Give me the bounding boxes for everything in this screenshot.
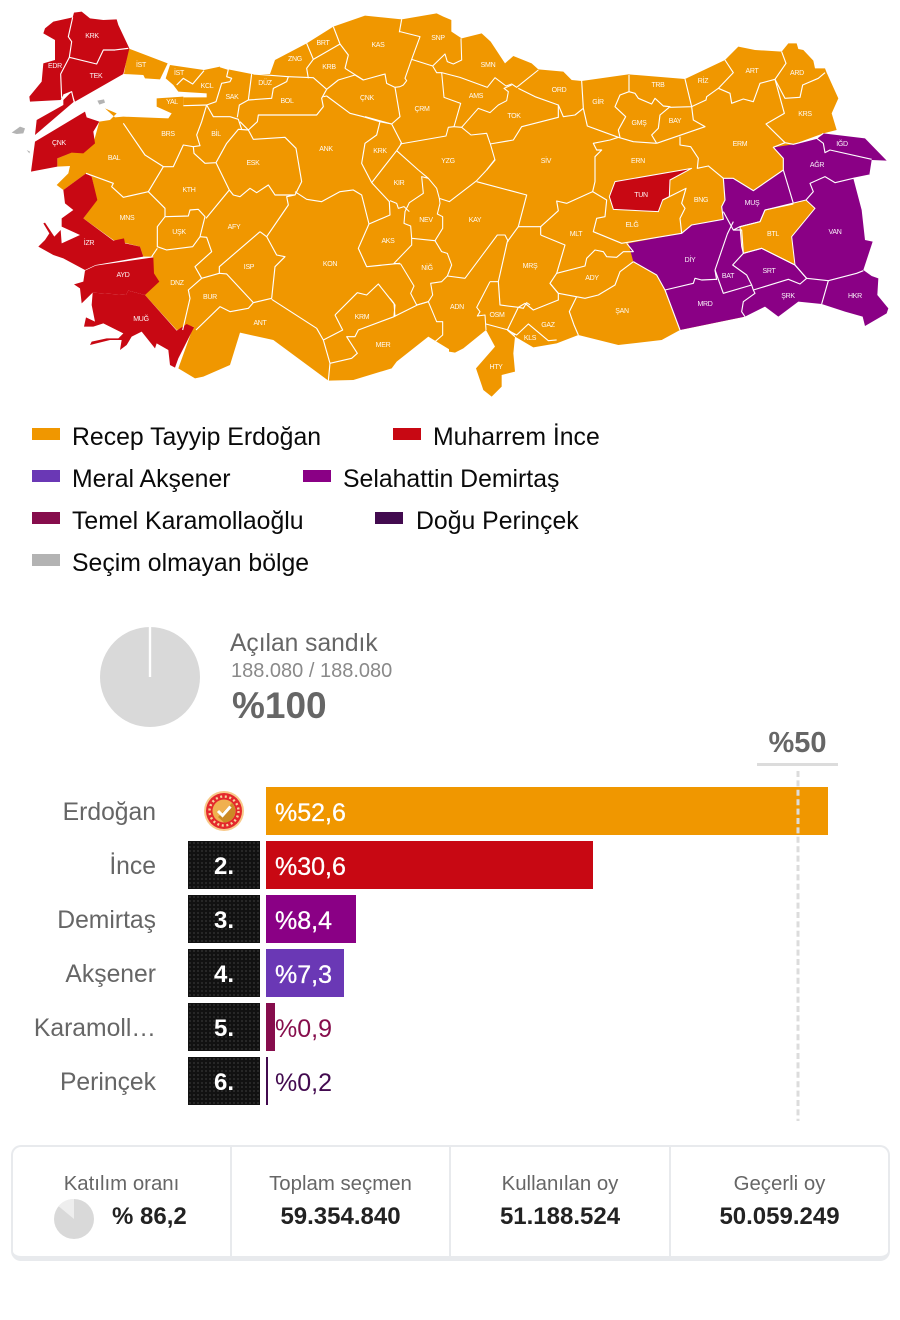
province labels: IĞD [836, 139, 848, 148]
row: İnce: %30,6 [275, 853, 346, 881]
province labels: BOL [280, 98, 294, 105]
province labels: TEK [90, 73, 103, 80]
Tunceli [609, 168, 692, 212]
province labels: ERN [631, 158, 645, 165]
row: Demirtaş: 3. [214, 907, 234, 934]
province labels: TRB [651, 82, 665, 89]
stat: votes used [451, 1147, 671, 1256]
opened ballot boxes text: %100 [232, 685, 327, 726]
province labels: ADN [450, 304, 464, 311]
province labels: YAL [166, 99, 178, 106]
province labels: EDR [48, 63, 62, 70]
province labels: KTH [182, 187, 196, 194]
province labels: SAK [225, 94, 239, 101]
southeast in Demirtaş purple [628, 133, 888, 330]
legend: Akşener: Meral Akşener [72, 466, 230, 493]
province labels: SMN [481, 62, 496, 69]
row: Demirtaş: Demirtaş [57, 907, 156, 934]
stat: turnout: % 86,2 [112, 1203, 187, 1230]
province labels: NİĞ [421, 263, 433, 272]
province labels: RİZ [698, 76, 709, 85]
province labels: AFY [228, 224, 241, 231]
stat: votes used: Kullanılan oy [502, 1173, 618, 1195]
province labels: KRK [373, 148, 387, 155]
map: Turkey provinces [12, 12, 888, 397]
province labels: ANK [319, 146, 333, 153]
province labels: KRK [85, 33, 99, 40]
province labels: BİL [211, 129, 221, 138]
row: Demirtaş [57, 895, 356, 943]
province labels: GİR [592, 97, 604, 106]
province labels: ŞRK [781, 293, 795, 300]
province labels: MRD [697, 301, 713, 308]
province labels: HTY [489, 364, 503, 371]
stat: turnout: Katılım oranı [64, 1173, 179, 1195]
map west half [12, 12, 451, 381]
row: Demirtaş: %8,4 [275, 907, 332, 935]
province labels: ŞAN [615, 308, 629, 315]
row: Erdoğan: %52,6 [275, 799, 346, 827]
legend: Erdoğan: Recep Tayyip Erdoğan [72, 424, 321, 451]
opened ballot boxes text [230, 630, 392, 726]
province labels: AMS [469, 93, 484, 100]
row: Perinçek: Perinçek [60, 1069, 156, 1096]
central borders: Nevşehir, Niğde, Kayseri, Adana [390, 170, 530, 342]
Muğla [84, 291, 194, 368]
İzmir [38, 173, 143, 270]
province labels: UŞK [172, 229, 186, 236]
province labels: ZNG [288, 56, 302, 63]
province labels: BUR [203, 294, 217, 301]
legend: İnce: Muharrem İnce [433, 424, 600, 451]
province labels [48, 33, 862, 371]
row: Perinçek: 6. [214, 1069, 234, 1096]
legend: Perinçek: Doğu Perinçek [416, 508, 579, 535]
Gelibolu [35, 92, 74, 135]
province labels: İST [136, 60, 147, 69]
province labels: ARD [790, 70, 804, 77]
legend: Demirtaş: Selahattin Demirtaş [343, 466, 559, 493]
province labels: MRŞ [523, 263, 538, 270]
row: Karamollaoğlu: %0,9 [275, 1015, 332, 1043]
province labels: BRT [317, 40, 331, 47]
province labels: HKR [848, 293, 862, 300]
row: Karamollaoğlu: Karamoll… [34, 1015, 156, 1042]
province labels: ISP [244, 264, 255, 271]
province labels: BAT [722, 273, 735, 280]
province labels: ANT [253, 320, 268, 327]
province labels: KIR [394, 180, 405, 187]
province labels: BAY [669, 118, 682, 125]
stat: total voters: 59.354.840 [280, 1203, 401, 1230]
province labels: KRB [322, 64, 336, 71]
row: Akşener: 4. [214, 961, 234, 988]
province labels: SRT [763, 268, 777, 275]
province labels: AKS [381, 238, 395, 245]
legend: no election: Seçim olmayan bölge [72, 550, 309, 577]
row: Akşener [65, 949, 344, 997]
stat: votes used: 51.188.524 [500, 1203, 620, 1230]
province labels: AĞR [810, 160, 824, 169]
western Anatolia in Erdoğan orange [57, 13, 451, 381]
row: Perinçek: %0,2 [275, 1069, 332, 1097]
stat: valid votes [719, 1173, 840, 1230]
no-election islands [12, 99, 105, 153]
province labels: TOK [507, 113, 521, 120]
province labels: ADY [585, 275, 599, 282]
province labels: NEV [419, 217, 433, 224]
province labels: ÇNK [52, 140, 67, 147]
stats panel [11, 1145, 890, 1261]
stat: valid votes: 50.059.249 [719, 1203, 840, 1230]
Çanakkale [31, 112, 99, 172]
province labels: BTL [767, 231, 779, 238]
province labels: KRS [798, 111, 812, 118]
province labels: KCL [201, 83, 214, 90]
province labels: MUŞ [745, 200, 760, 207]
row: Erdoğan [63, 787, 828, 835]
province labels: DNZ [170, 280, 185, 287]
Yalova coast [157, 97, 183, 105]
Bitlis [740, 200, 815, 265]
Thrace in İnce red [29, 12, 129, 102]
province labels: MER [376, 342, 391, 349]
icon: turnout pie [54, 1199, 94, 1239]
results rows [34, 787, 828, 1105]
stat: total voters [232, 1147, 451, 1256]
province labels: DÜZ [258, 79, 273, 87]
map east half [449, 30, 888, 397]
province labels: ELĞ [625, 220, 639, 229]
province labels: TUN [634, 192, 648, 199]
province labels: ART [746, 68, 760, 75]
50 percent dashed line [796, 771, 800, 1121]
row: Erdoğan: Erdoğan [63, 799, 156, 826]
row: İnce [109, 841, 593, 889]
province labels: MLT [570, 231, 583, 238]
province labels: ÇNK [360, 95, 375, 102]
province labels: ERM [733, 141, 748, 148]
province labels: ÇRM [414, 106, 430, 113]
opened ballot boxes text: Açılan sandık [230, 630, 378, 657]
province labels: KAY [469, 217, 482, 224]
legend [32, 423, 600, 577]
stat: valid votes: Geçerli oy [734, 1173, 825, 1195]
province labels: MUĞ [133, 314, 149, 323]
province labels: ESK [246, 160, 260, 167]
province labels: SİV [541, 156, 552, 165]
province labels: OSM [489, 312, 505, 319]
province labels: YZG [441, 158, 455, 165]
province labels: KLS [524, 335, 537, 342]
province labels: SNP [431, 35, 445, 42]
stat: turnout [13, 1147, 232, 1256]
opened ballot boxes text: 188.080 / 188.080 [231, 660, 392, 682]
province labels: BRS [161, 131, 175, 138]
row: İnce: İnce [109, 853, 156, 880]
50 percent marker: %50 [768, 727, 827, 759]
central borders: Sinop, Samsun, Çorum, Amasya [400, 32, 538, 170]
row: Karamollaoğlu [34, 1003, 332, 1051]
province labels: DİY [685, 255, 696, 264]
province labels: MNS [120, 215, 135, 222]
Aydın [74, 257, 159, 303]
province labels: VAN [829, 229, 842, 236]
province labels: GMŞ [631, 120, 647, 127]
west province borders [61, 17, 428, 381]
eastern Anatolia in Erdoğan orange [449, 30, 838, 397]
row: Akşener: Akşener [65, 961, 156, 988]
50 percent marker [757, 727, 838, 766]
stat: total voters: Toplam seçmen [269, 1173, 412, 1195]
province labels: KAS [371, 42, 385, 49]
İstanbul European side [124, 48, 168, 79]
legend: Karamollaoğlu: Temel Karamollaoğlu [72, 508, 304, 535]
province labels: BNG [694, 197, 708, 204]
row: Karamollaoğlu: 5. [214, 1015, 234, 1042]
province labels: BAL [108, 155, 121, 162]
east province borders [477, 52, 872, 341]
province labels: KRM [355, 314, 370, 321]
province labels: AYD [117, 272, 130, 279]
row: İnce: 2. [214, 853, 234, 880]
opened ballot boxes pie [100, 627, 200, 727]
province labels: GAZ [541, 322, 556, 329]
row: Perinçek [60, 1057, 332, 1105]
province labels: İST [174, 68, 185, 77]
province labels: İZR [84, 238, 94, 247]
province labels: KON [323, 261, 337, 268]
province labels: ORD [552, 87, 567, 94]
row: Akşener: %7,3 [275, 961, 332, 989]
